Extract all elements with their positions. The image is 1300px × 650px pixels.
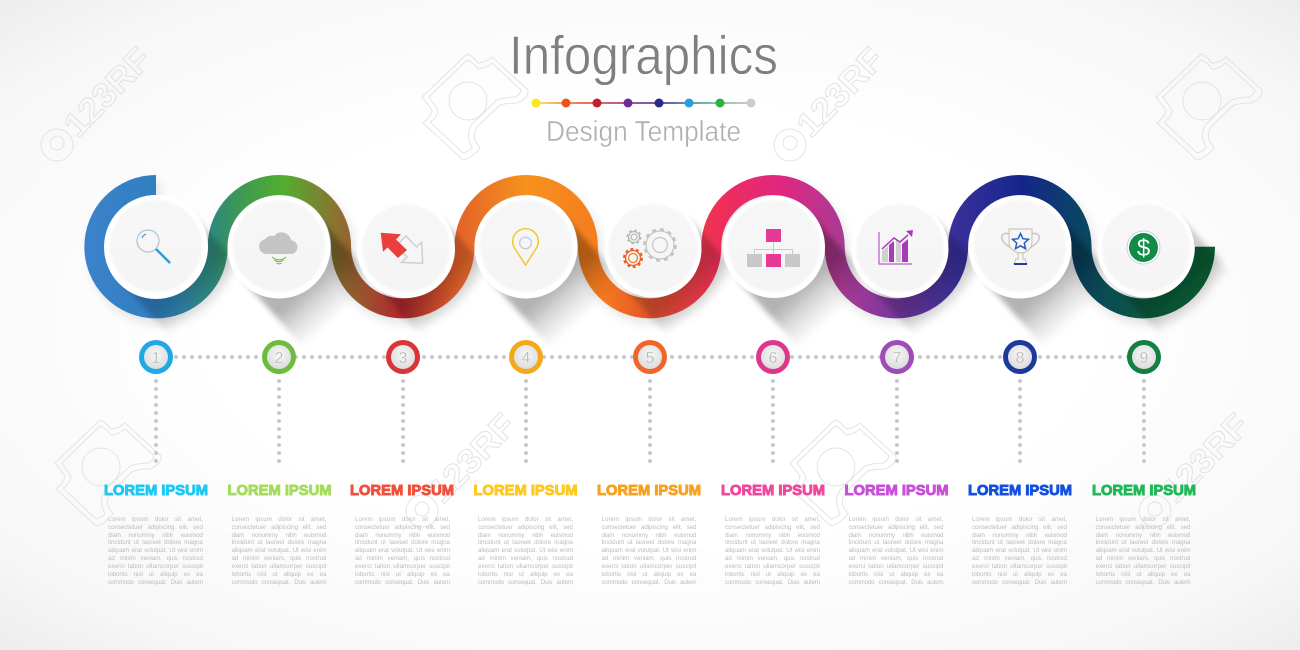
text block 9: commodo consequat. Duis autem [1096,579,1190,586]
text block 5 [597,483,701,586]
icon: trophy [1002,229,1039,265]
icon: diagonal arrows [381,233,423,263]
circle 5 with gears icon [604,200,702,298]
text block 6: lobortis nisl ut aliquip ex ea [725,571,821,578]
text block 2: lobortis nisl ut aliquip ex ea [232,571,327,578]
text block 3: commodo consequat. Duis autem [355,579,450,586]
text block 4: lobortis nisl ut aliquip ex ea [478,571,574,578]
text block 1: aliquam erat volutpat. Ut wisi enim [108,547,203,554]
text block 7: exerci tation ullamcorper suscipit [848,563,944,570]
text block 4 [474,483,578,586]
number badge 3 [386,340,420,374]
text block 1: ad minim veniam, quis nostrud [108,555,204,562]
watermarks: 123RF [56,40,159,145]
text block 7 [844,483,948,586]
text block 6: LOREM IPSUM [721,483,825,499]
text block 7: tincidunt ut laoreet dolore magna [848,539,944,546]
number badge 7 [880,340,914,374]
text block 6: commodo consequat. Duis autem [725,579,820,586]
text block 4: tincidunt ut laoreet dolore magna [478,539,574,546]
text block 7: LOREM IPSUM [844,483,948,499]
circle 7 with growth chart icon [852,200,948,298]
text block 3: ad minim veniam, quis nostrud [355,555,451,562]
text block 8: aliquam erat volutpat. Ut wisi enim [972,547,1067,554]
text block 7: aliquam erat volutpat. Ut wisi enim [848,547,944,554]
text block 9: LOREM IPSUM [1092,483,1196,499]
icon: cloud with signal [259,232,297,264]
text block 8: Lorem ipsum dolor sit amet, [972,516,1067,523]
text block 3: diam nonummy nibh euismod [355,532,451,539]
text block 2: diam nonummy nibh euismod [232,532,327,539]
number badge 5: 5 [646,350,655,367]
number badge 8 [1003,340,1037,374]
watermarks: 123RF [789,40,892,145]
text block 1: lobortis nisl ut aliquip ex ea [108,571,204,578]
text block 3: tincidunt ut laoreet dolore magna [355,539,451,546]
circle 9 with dollar icon [1098,200,1194,298]
circle 2 with cloud icon [228,196,330,298]
circle 8 with trophy icon [968,196,1072,298]
text block 9: Lorem ipsum dolor sit amet, [1096,516,1191,523]
text block 9: tincidunt ut laoreet dolore magna [1096,539,1191,546]
icon: gears [624,230,676,267]
watermarks: 123RF [421,406,524,511]
text block 5: exerci tation ullamcorper suscipit [602,563,697,570]
text block 7: ad minim veniam, quis nostrud [848,555,944,562]
text block 4: commodo consequat. Duis autem [478,579,573,586]
icon: location pin [513,229,538,265]
text block 8: diam nonummy nibh euismod [972,532,1068,539]
text block 8: tincidunt ut laoreet dolore magna [972,539,1068,546]
circle 6 with org chart icon [723,196,825,298]
text block 7: lobortis nisl ut aliquip ex ea [848,571,944,578]
text block 8: lobortis nisl ut aliquip ex ea [972,571,1068,578]
text block 5: diam nonummy nibh euismod [602,532,697,539]
number badge 6: 6 [769,350,778,367]
text block 3: aliquam erat volutpat. Ut wisi enim [355,547,450,554]
number badge 7: 7 [893,350,902,367]
title divider with coloured dots [532,98,756,108]
text block 4: Lorem ipsum dolor sit amet, [478,516,573,523]
text block 3: exerci tation ullamcorper suscipit [355,563,450,570]
text block 5: ad minim veniam, quis nostrud [602,555,697,562]
text block 6: exerci tation ullamcorper suscipit [725,563,820,570]
text block 1: diam nonummy nibh euismod [108,532,204,539]
text block 9: exerci tation ullamcorper suscipit [1096,563,1191,570]
subtitle: Design Template [546,116,741,148]
text block 3: consectetuer adipiscing elit, sed [355,524,451,531]
circle 3 with arrows icon [357,200,455,298]
dotted timeline connectors [156,357,1144,465]
number badge 3: 3 [399,350,408,367]
text block 3: LOREM IPSUM [350,483,454,499]
text block 2: commodo consequat. Duis autem [232,579,326,586]
text block 8: consectetuer adipiscing elit, sed [972,524,1068,531]
text block 2: LOREM IPSUM [228,483,332,499]
icon: dollar coin: $ [1137,235,1150,262]
text block 1: tincidunt ut laoreet dolore magna [108,539,204,546]
number badge 8: 8 [1016,350,1025,367]
text block 6: ad minim veniam, quis nostrud [725,555,821,562]
icon: magnifier [137,230,170,263]
text block 7: Lorem ipsum dolor sit amet, [848,516,944,523]
text block 5: LOREM IPSUM [597,483,701,499]
text block 4: aliquam erat volutpat. Ut wisi enim [478,547,573,554]
text block 5: Lorem ipsum dolor sit amet, [602,516,697,523]
text block 9: lobortis nisl ut aliquip ex ea [1096,571,1191,578]
circle 4 with pin icon [474,196,578,298]
text block 7: consectetuer adipiscing elit, sed [848,524,944,531]
text block 6: Lorem ipsum dolor sit amet, [725,516,820,523]
text block 9: consectetuer adipiscing elit, sed [1096,524,1191,531]
text block 3: Lorem ipsum dolor sit amet, [355,516,450,523]
text block 4: ad minim veniam, quis nostrud [478,555,574,562]
icon: org chart [747,229,800,267]
text block 4: LOREM IPSUM [474,483,578,499]
text block 4: consectetuer adipiscing elit, sed [478,524,574,531]
text block 1: exerci tation ullamcorper suscipit [108,563,203,570]
text block 2: consectetuer adipiscing elit, sed [232,524,327,531]
text block 2: tincidunt ut laoreet dolore magna [232,539,327,546]
text block 5: commodo consequat. Duis autem [602,579,696,586]
text block 9: ad minim veniam, quis nostrud [1096,555,1191,562]
text block 9: aliquam erat volutpat. Ut wisi enim [1096,547,1190,554]
text block 3: lobortis nisl ut aliquip ex ea [355,571,451,578]
text block 1: Lorem ipsum dolor sit amet, [108,516,203,523]
number badge 2 [262,340,296,374]
watermarks [41,40,1262,527]
number badge 6 [756,340,790,374]
text block 8: ad minim veniam, quis nostrud [972,555,1068,562]
text block 1: consectetuer adipiscing elit, sed [108,524,204,531]
text block 1: LOREM IPSUM [104,483,208,499]
text block 9: diam nonummy nibh euismod [1096,532,1191,539]
text block 2: aliquam erat volutpat. Ut wisi enim [232,547,326,554]
text block 8: LOREM IPSUM [968,483,1072,499]
ribbon soft shadow [98,191,1209,314]
text block 5: tincidunt ut laoreet dolore magna [602,539,697,546]
text block 3 [350,483,454,586]
text block 6: aliquam erat volutpat. Ut wisi enim [725,547,820,554]
text block 2: ad minim veniam, quis nostrud [232,555,327,562]
title: Infographics [509,24,778,86]
text block 4: exerci tation ullamcorper suscipit [478,563,573,570]
text block 5: consectetuer adipiscing elit, sed [602,524,697,531]
number badge 4 [509,340,543,374]
title [509,24,778,148]
text block 5: aliquam erat volutpat. Ut wisi enim [602,547,696,554]
text block 1 [104,483,208,586]
watermarks: 123RF [1154,406,1257,511]
text block 9 [1092,483,1196,586]
ribbon [94,185,1205,308]
text block 2: Lorem ipsum dolor sit amet, [232,516,327,523]
text block 6: consectetuer adipiscing elit, sed [725,524,821,531]
text block 8: exerci tation ullamcorper suscipit [972,563,1067,570]
text block 7: commodo consequat. Duis autem [848,579,944,586]
number badge 9 [1127,340,1161,374]
text block 6: tincidunt ut laoreet dolore magna [725,539,821,546]
text block 2 [228,483,332,586]
text block 6: diam nonummy nibh euismod [725,532,821,539]
number badge 1: 1 [152,350,161,367]
text block 6 [721,483,825,586]
number badge 5 [633,340,667,374]
circle 1 with magnifier icon [104,195,208,299]
icon: growth chart [879,230,913,264]
text block 8 [968,483,1072,586]
text block 4: diam nonummy nibh euismod [478,532,574,539]
number badge 1 [139,340,173,374]
text block 5: lobortis nisl ut aliquip ex ea [602,571,697,578]
long circle shadows [120,214,1232,348]
text block 2: exerci tation ullamcorper suscipit [232,563,327,570]
number badge 2: 2 [275,350,284,367]
text block 8: commodo consequat. Duis autem [972,579,1067,586]
number badge 4: 4 [522,350,531,367]
number badge 9: 9 [1140,350,1149,367]
text block 7: diam nonummy nibh euismod [848,532,944,539]
text block 1: commodo consequat. Duis autem [108,579,203,586]
